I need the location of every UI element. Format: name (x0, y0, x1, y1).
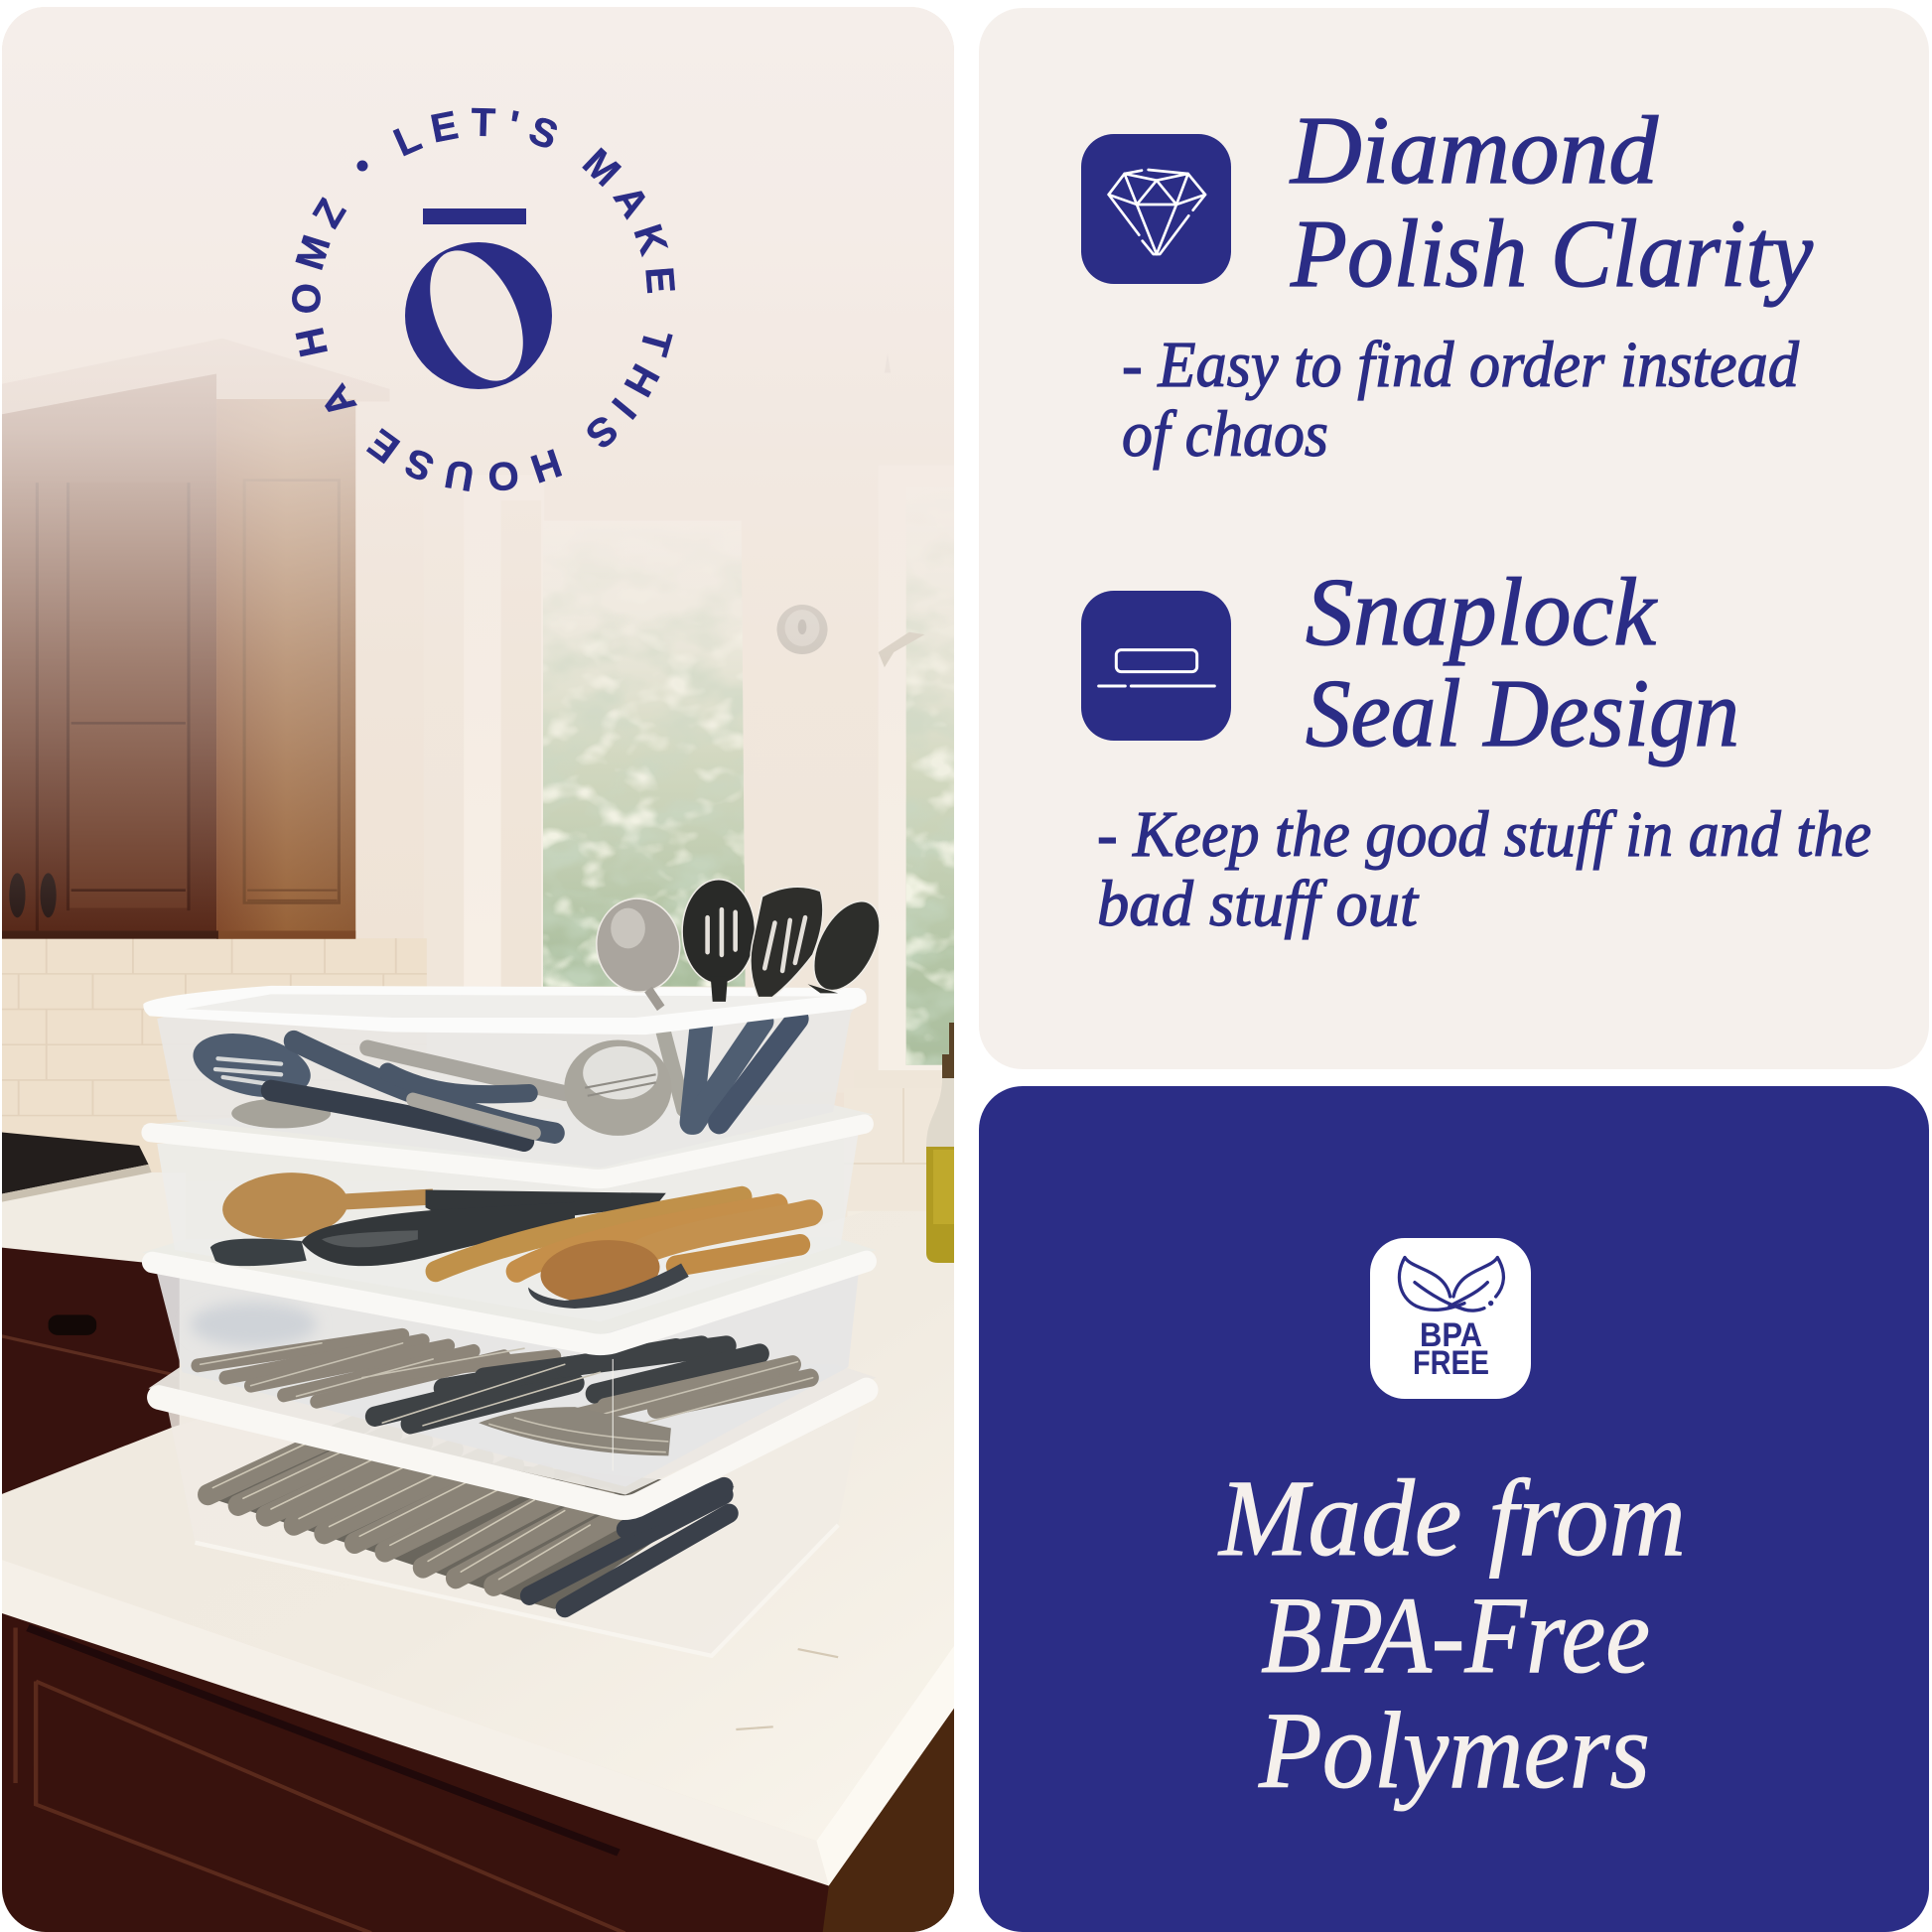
panel: features (979, 8, 1929, 1069)
upper wood cabinet (2, 373, 355, 939)
heading: Diamond Polish Clarity (1289, 97, 1813, 308)
text: diamond benefit: - Easy to find order instead (1122, 329, 1800, 401)
panel: kitchen photo with stacked storage boxes (0, 7, 965, 1932)
heading: Diamond Polish Clarity: Polish Clarity (1290, 201, 1813, 308)
olive oil bottle (926, 1023, 954, 1263)
heading: Diamond Polish Clarity: Diamond (1289, 97, 1659, 205)
wall knob (776, 605, 828, 654)
heading: Made from BPA-Free Polymers: Made from (1217, 1457, 1686, 1579)
box 3 with cutlery (157, 1274, 859, 1486)
dark back cabinet (0, 1247, 180, 1499)
top box rim (143, 986, 867, 1035)
circular slogan text: LET'S MAKE THIS HOUSE A HOMZ (292, 107, 675, 491)
heading: Snaplock Seal Design: Seal Design (1306, 660, 1739, 767)
logo badge (292, 107, 675, 491)
icon: snaplock seal (1081, 591, 1231, 741)
counters and lower cabinets (0, 1132, 965, 1932)
window sill and right wall tile (854, 1070, 942, 1165)
island counter top (0, 1211, 965, 1841)
panel: BPA free (979, 1086, 1929, 1932)
lid 2 (142, 1104, 874, 1179)
lid 4 (149, 1364, 876, 1508)
top box body with utensils (157, 989, 866, 1152)
spoons rising above top box (589, 880, 894, 1008)
stacked storage boxes (142, 880, 894, 1656)
island wood cabinet (0, 1612, 965, 1932)
kitchen wall, cabinet and window (0, 339, 963, 1181)
box 4 with knives (167, 1407, 861, 1656)
heading: Snaplock Seal Design (1306, 559, 1739, 767)
icon: BPA free leaves (1370, 1238, 1531, 1399)
icon: BPA free leaves: BPA (1420, 1316, 1482, 1354)
heading: Made from BPA-Free Polymers: Polymers (1258, 1690, 1650, 1811)
lid 3 (142, 1237, 876, 1344)
text: snaplock benefit (1097, 798, 1871, 940)
box 2 with wooden utensils (157, 1133, 859, 1321)
logo mark (405, 208, 552, 395)
text: diamond benefit (1122, 329, 1800, 471)
heading: Made from BPA-Free Polymers: BPA-Free (1261, 1575, 1650, 1696)
text: snaplock benefit: - Keep the good stuff in and the (1097, 798, 1871, 871)
text: diamond benefit: of chaos (1122, 398, 1328, 471)
separator dot (357, 161, 367, 171)
icon: BPA free leaves: FREE (1413, 1344, 1489, 1382)
text: snaplock benefit: bad stuff out (1097, 868, 1420, 940)
heading: Snaplock Seal Design: Snaplock (1306, 559, 1657, 666)
tile backsplash (0, 938, 427, 1181)
top fade overlay over kitchen photo (2, 7, 954, 950)
icon: diamond (1081, 134, 1231, 284)
heading: Made from BPA-Free Polymers (1217, 1457, 1686, 1811)
